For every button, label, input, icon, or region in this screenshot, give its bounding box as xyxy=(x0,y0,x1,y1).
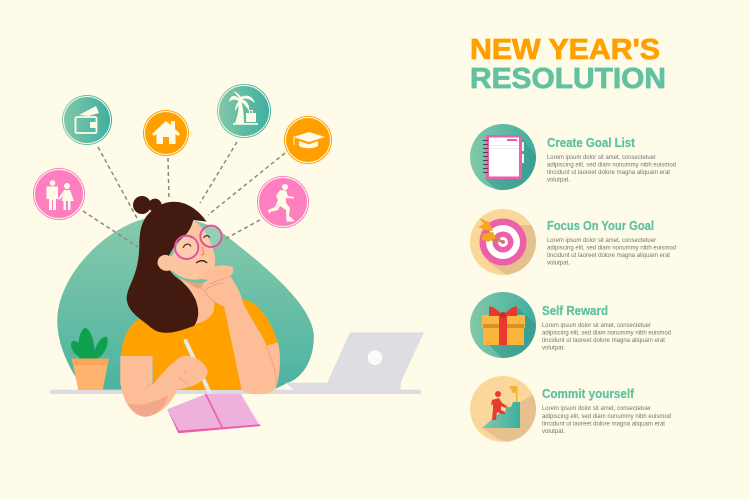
body text xyxy=(542,322,671,352)
desk xyxy=(50,390,421,394)
woman xyxy=(120,196,280,417)
icon: palm and suitcase xyxy=(217,84,271,138)
body text: Lorem ipsum dolor sit amet, consectetuer xyxy=(547,237,657,244)
icon: target xyxy=(470,209,537,276)
step 4: commit yourself xyxy=(470,376,671,445)
title: RESOLUTION xyxy=(470,63,666,95)
body text: adipiscing elit, sed diam nonummy nibh euismod xyxy=(547,162,676,168)
title xyxy=(470,34,666,95)
laptop xyxy=(285,332,424,390)
notebook xyxy=(167,394,261,433)
face xyxy=(158,220,215,280)
potted plant xyxy=(71,328,109,390)
body text: Lorem ipsum dolor sit amet, consectetuer xyxy=(547,154,657,161)
icon: runner xyxy=(257,176,309,228)
body text: Lorem ipsum dolor sit amet, consectetuer xyxy=(542,322,652,329)
body text: volutpat. xyxy=(547,176,570,184)
body text: tincidunt ut laoreet dolore magna aliquam erat xyxy=(547,252,670,259)
icon: climber on hill xyxy=(470,376,536,442)
body text xyxy=(542,405,671,435)
icon: graduation cap xyxy=(284,116,332,164)
body text: adipiscing elit, sed diam nonummy nibh euismod xyxy=(542,413,671,420)
right arm and hand on chin xyxy=(197,265,276,394)
heading: Commit yourself xyxy=(542,387,635,401)
body text: adipiscing elit, sed diam nonummy nibh euismod xyxy=(547,244,676,252)
dashed connector lines xyxy=(83,142,285,247)
body text: Lorem ipsum dolor sit amet, consectetuer xyxy=(542,405,652,412)
upper arm xyxy=(242,342,280,394)
body text: volutpat. xyxy=(542,428,565,435)
glasses xyxy=(175,226,222,259)
body text: adipiscing elit, sed diam nonummy nibh euismod xyxy=(542,330,671,336)
body text: volutpat. xyxy=(542,344,565,352)
eyes and mouth xyxy=(177,236,209,263)
icon: notebook xyxy=(470,124,537,191)
shirt xyxy=(121,295,278,390)
body text xyxy=(547,154,676,184)
body text: volutpat. xyxy=(547,260,570,266)
step 3: self reward xyxy=(470,292,671,359)
illustration: thinking woman at desk xyxy=(50,196,424,433)
heading: Focus On Your Goal xyxy=(547,219,654,233)
left arm and hand with pen xyxy=(120,341,210,417)
body text: tincidunt ut laoreet dolore magna aliquam erat xyxy=(542,420,665,428)
icon: wallet xyxy=(62,95,112,145)
body text: tincidunt ut laoreet dolore magna aliquam erat xyxy=(547,169,670,176)
step 2: focus on your goal xyxy=(470,209,676,276)
heading: Create Goal List xyxy=(547,136,636,150)
heading: Self Reward xyxy=(542,304,608,318)
icon: gift xyxy=(470,292,537,359)
icon: house xyxy=(143,110,189,156)
icon: couple xyxy=(33,168,85,220)
body text: tincidunt ut laoreet dolore magna aliquam erat xyxy=(542,337,665,344)
title: NEW YEAR'S xyxy=(470,34,660,66)
body text xyxy=(547,237,676,266)
neck xyxy=(180,278,215,324)
hair xyxy=(127,202,207,333)
step 1: create goal list xyxy=(470,124,676,191)
ear xyxy=(158,255,171,271)
background blob xyxy=(57,217,314,390)
